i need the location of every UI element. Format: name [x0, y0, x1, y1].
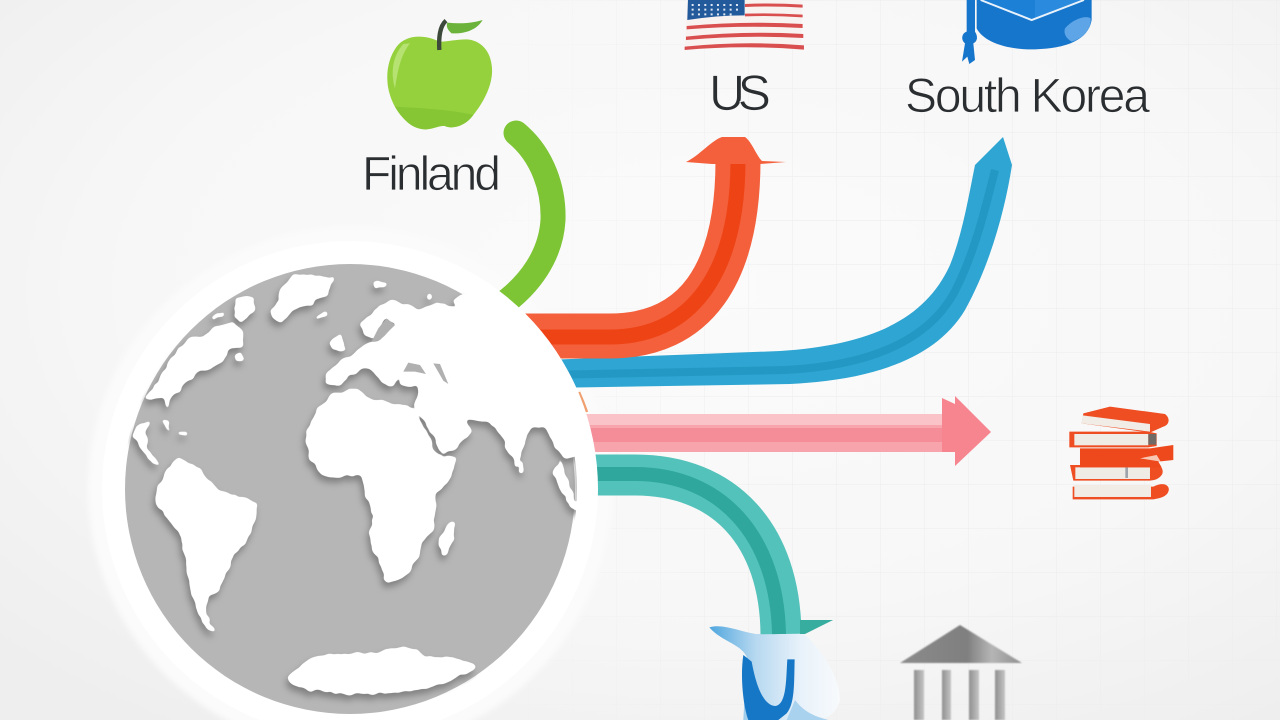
- label: Finland: Finland: [362, 148, 501, 201]
- orange sliver: [579, 392, 587, 412]
- background grid: [678, 0, 1280, 618]
- arrow: teal down to funnel: [585, 474, 833, 634]
- arrow: blue to South Korea: [545, 137, 1012, 388]
- ocean disc: [125, 264, 575, 714]
- arrow: green to Finland: [500, 133, 553, 306]
- label: US: US: [709, 65, 771, 121]
- icon: stack of books: [1069, 407, 1173, 499]
- continents: [132, 275, 620, 695]
- arrow: pink to books: [575, 396, 991, 466]
- icon: institution building: [900, 625, 1022, 720]
- label: South Korea: South Korea: [905, 70, 1150, 123]
- arrow: red to US: [510, 137, 786, 337]
- icon: green apple: [387, 20, 492, 129]
- globe white rim: [102, 241, 598, 720]
- globe outer halo: [88, 227, 612, 720]
- icon: graduation cap: [962, 0, 1092, 64]
- icon: US flag: [685, 0, 804, 50]
- globe: [125, 264, 598, 714]
- icon: blue funnel splash: [709, 626, 840, 720]
- inland seas: [372, 318, 448, 384]
